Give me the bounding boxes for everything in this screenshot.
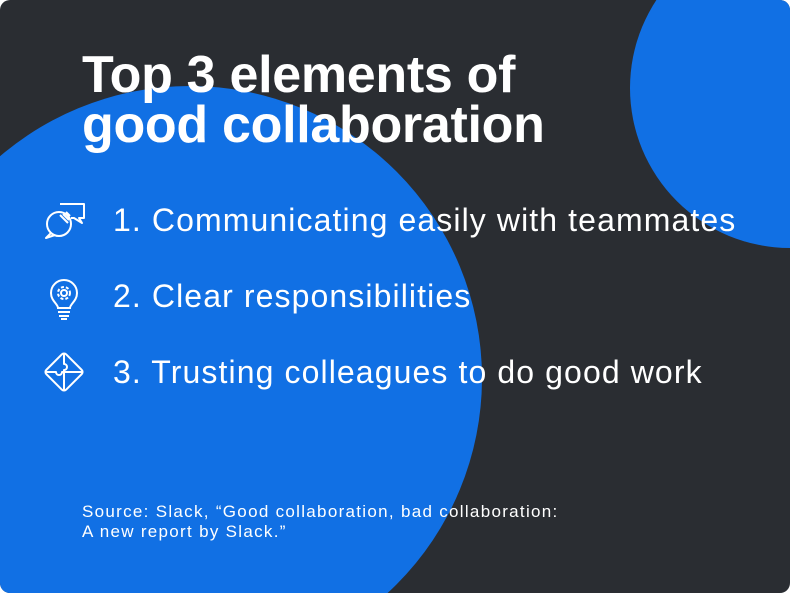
icon: lightbulb with gear: [50, 279, 78, 320]
icon: chat bubbles: [45, 203, 85, 239]
background circle: large blue: [0, 86, 482, 593]
item 2: 2. Clear responsibilities: [113, 278, 471, 314]
background circle: top-right blue: [630, 0, 790, 248]
item 1: 1. Communicating easily with teammates: [113, 202, 736, 238]
title: Top 3 elements of: [82, 46, 515, 104]
source: A new report by Slack.”: [82, 522, 287, 541]
source: [82, 502, 559, 541]
title: good collaboration: [82, 96, 545, 154]
icon: puzzle: [44, 352, 84, 392]
title: [82, 46, 545, 154]
source: Source: Slack, “Good collaboration, bad collaboration:: [82, 502, 559, 521]
item 3: 3. Trusting colleagues to do good work: [113, 354, 703, 390]
